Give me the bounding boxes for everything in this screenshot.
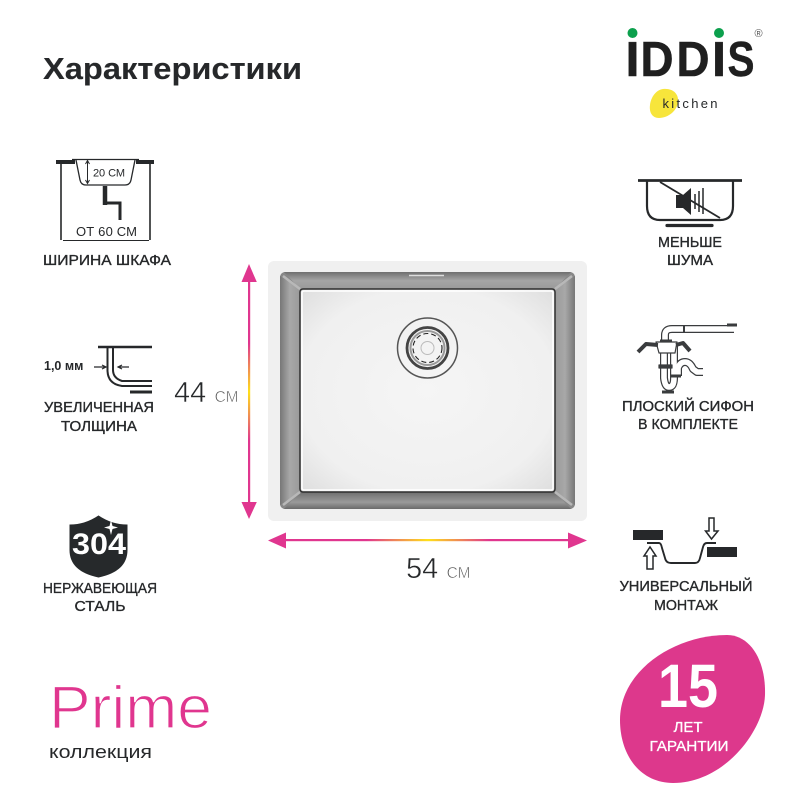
icon: cabinet width (56, 160, 154, 240)
warranty badge: ЛЕТ (673, 719, 703, 736)
logo: IDDIS kitchen: ® (754, 28, 763, 40)
logo: IDDIS kitchen: D (676, 33, 710, 87)
icon: flat siphon (638, 325, 737, 392)
label: less noise line 2: ШУМА (667, 252, 713, 269)
logo: IDDIS kitchen (626, 28, 763, 118)
sink floor (300, 289, 555, 492)
warranty badge: ГАРАНТИИ (650, 738, 728, 755)
dimension: 44 cm: 44 СМ (174, 377, 239, 409)
icon: universal mounting (633, 518, 737, 569)
icon: 304 steel shield: 304 (72, 528, 126, 561)
icon: thickness (44, 347, 152, 392)
logo: IDDIS kitchen: I (712, 33, 726, 87)
drain (398, 318, 458, 378)
arrow: width 54 cm (268, 532, 587, 548)
collection caption: коллекция (49, 741, 152, 762)
label: cabinet width: ШИРИНА ШКАФА (43, 252, 171, 269)
logo: IDDIS kitchen: kitchen (662, 96, 720, 111)
title: Характеристики (43, 51, 302, 86)
dimension: 54 cm: 54 СМ (406, 553, 471, 585)
logo: IDDIS kitchen: I (626, 33, 640, 87)
label: siphon: ПЛОСКИЙ СИФОН (622, 397, 754, 415)
arrow: height 44 cm (242, 264, 257, 519)
warranty badge: 15 (658, 652, 718, 720)
icon: less noise (638, 180, 742, 226)
label: steel: НЕРЖАВЕЮЩАЯ (43, 580, 157, 597)
icon: 304 steel shield (70, 516, 127, 577)
icon: cabinet width: 20 СМ (93, 168, 125, 180)
icon: thickness: 1,0 мм (44, 359, 83, 373)
label: less noise: МЕНЬШЕ (658, 234, 722, 251)
sink bowl walls (280, 272, 575, 509)
label: siphon line 2: В КОМПЛЕКТЕ (638, 416, 738, 433)
label: mounting line 2: МОНТАЖ (654, 597, 718, 614)
label: mounting: УНИВЕРСАЛЬНЫЙ (620, 577, 752, 595)
label: thickness line 2: ТОЛЩИНА (61, 418, 137, 435)
label: thickness: УВЕЛИЧЕННАЯ (44, 399, 154, 416)
icon: cabinet width: ОТ 60 СМ (76, 224, 137, 239)
warranty badge (620, 635, 765, 783)
collection name: Prime (49, 674, 212, 741)
sink photo (268, 261, 587, 521)
sink rim (268, 261, 587, 521)
label: steel line 2: СТАЛЬ (74, 598, 126, 615)
logo: IDDIS kitchen: S (728, 33, 754, 87)
logo: IDDIS kitchen: D (640, 33, 674, 87)
